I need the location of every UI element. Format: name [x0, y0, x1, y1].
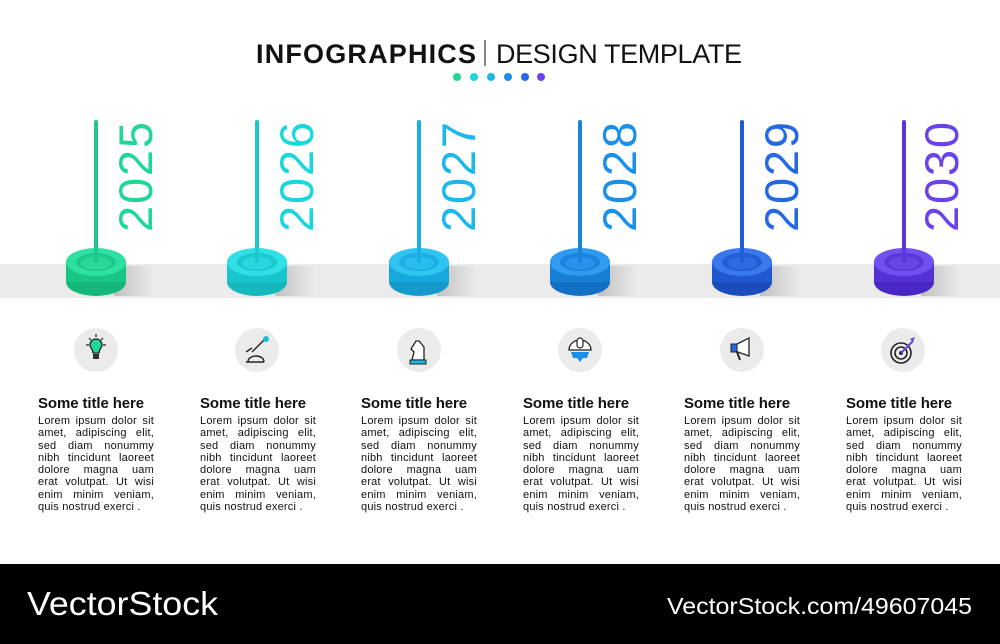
text: column 4: nibh tincidunt laoreet	[523, 452, 639, 464]
text: column 2: quis nostrud exerci .	[200, 501, 303, 513]
text: column 5: enim minim veniam,	[684, 489, 800, 501]
milestone 2030: 2030	[915, 122, 968, 232]
milestone 2029	[712, 120, 808, 296]
text: column 5: amet, adipiscing elit,	[684, 427, 800, 439]
text: column 1	[38, 395, 154, 513]
timeline band	[0, 264, 1000, 298]
text: column 3	[361, 395, 477, 513]
icon: helmet gear	[558, 328, 602, 372]
icon: bulb	[74, 328, 118, 372]
text: column 1: sed diam nonummy	[38, 440, 154, 452]
text: column 2: Lorem ipsum dolor sit	[200, 415, 316, 427]
text: column 4: dolore magna uam	[523, 464, 639, 476]
title: DESIGN TEMPLATE	[496, 39, 742, 69]
text: column 5: Lorem ipsum dolor sit	[684, 415, 800, 427]
milestone 2027: 2027	[432, 122, 485, 232]
milestone 2028	[550, 120, 646, 296]
text: column 5: erat volutpat. Ut wisi	[684, 476, 800, 488]
text: column 5: sed diam nonummy	[684, 440, 800, 452]
footer	[0, 564, 1000, 644]
text: column 6: Lorem ipsum dolor sit	[846, 415, 962, 427]
text: column 6	[846, 395, 962, 513]
text: column 3: erat volutpat. Ut wisi	[361, 476, 477, 488]
text: column 2: erat volutpat. Ut wisi	[200, 476, 316, 488]
text: column 5	[684, 395, 800, 513]
text: column 2: amet, adipiscing elit,	[200, 427, 316, 439]
milestone 2025	[66, 120, 162, 296]
milestone 2025: 2025	[109, 122, 162, 232]
footer: VectorStock	[27, 585, 219, 622]
text: column 2: sed diam nonummy	[200, 440, 316, 452]
text: column 5: quis nostrud exerci .	[684, 501, 787, 513]
text: column 6: amet, adipiscing elit,	[846, 427, 962, 439]
text: column 4: amet, adipiscing elit,	[523, 427, 639, 439]
text: column 6: enim minim veniam,	[846, 489, 962, 501]
text: column 3: enim minim veniam,	[361, 489, 477, 501]
text: column 3: sed diam nonummy	[361, 440, 477, 452]
text: column 2: enim minim veniam,	[200, 489, 316, 501]
text: column 5: nibh tincidunt laoreet	[684, 452, 800, 464]
text: column 3: amet, adipiscing elit,	[361, 427, 477, 439]
text: column 1: enim minim veniam,	[38, 489, 154, 501]
milestone 2026	[227, 120, 323, 296]
text: column 5: dolore magna uam	[684, 464, 800, 476]
text: column 3: quis nostrud exerci .	[361, 501, 464, 513]
text: column 4: erat volutpat. Ut wisi	[523, 476, 639, 488]
text: column 3: dolore magna uam	[361, 464, 477, 476]
text: column 1: Lorem ipsum dolor sit	[38, 415, 154, 427]
milestone 2027	[389, 120, 485, 296]
text: column 3: nibh tincidunt laoreet	[361, 452, 477, 464]
icon: megaphone	[720, 328, 764, 372]
text: column 4: sed diam nonummy	[523, 440, 639, 452]
text: column 4: Lorem ipsum dolor sit	[523, 415, 639, 427]
text: column 6: quis nostrud exerci .	[846, 501, 949, 513]
text: column 1: Some title here	[38, 395, 144, 412]
text: column 4: quis nostrud exerci .	[523, 501, 626, 513]
title: INFOGRAPHICS	[256, 39, 476, 69]
text: column 4: Some title here	[523, 395, 629, 412]
text: column 1: quis nostrud exerci .	[38, 501, 141, 513]
text: column 2: nibh tincidunt laoreet	[200, 452, 316, 464]
text: column 1: nibh tincidunt laoreet	[38, 452, 154, 464]
milestone 2029: 2029	[755, 122, 808, 232]
text: column 1: erat volutpat. Ut wisi	[38, 476, 154, 488]
text: column 6: nibh tincidunt laoreet	[846, 452, 962, 464]
text: column 6: Some title here	[846, 395, 952, 412]
text: column 3: Some title here	[361, 395, 467, 412]
text: column 2: Some title here	[200, 395, 306, 412]
footer: VectorStock.com/49607045	[667, 593, 972, 619]
text: column 5: Some title here	[684, 395, 790, 412]
text: column 3: Lorem ipsum dolor sit	[361, 415, 477, 427]
text: column 6: dolore magna uam	[846, 464, 962, 476]
milestone 2030	[874, 120, 968, 296]
icon: microscope	[235, 328, 279, 372]
milestone 2026: 2026	[270, 122, 323, 232]
text: column 2	[200, 395, 316, 513]
text: column 2: dolore magna uam	[200, 464, 316, 476]
dots	[453, 73, 545, 81]
text: column 1: dolore magna uam	[38, 464, 154, 476]
icon: target	[881, 328, 925, 372]
text: column 4: enim minim veniam,	[523, 489, 639, 501]
text: column 1: amet, adipiscing elit,	[38, 427, 154, 439]
text: column 6: sed diam nonummy	[846, 440, 962, 452]
icon: chess knight	[397, 328, 441, 372]
text: column 6: erat volutpat. Ut wisi	[846, 476, 962, 488]
milestone 2028: 2028	[593, 122, 646, 232]
text: column 4	[523, 395, 639, 513]
title	[256, 39, 742, 69]
